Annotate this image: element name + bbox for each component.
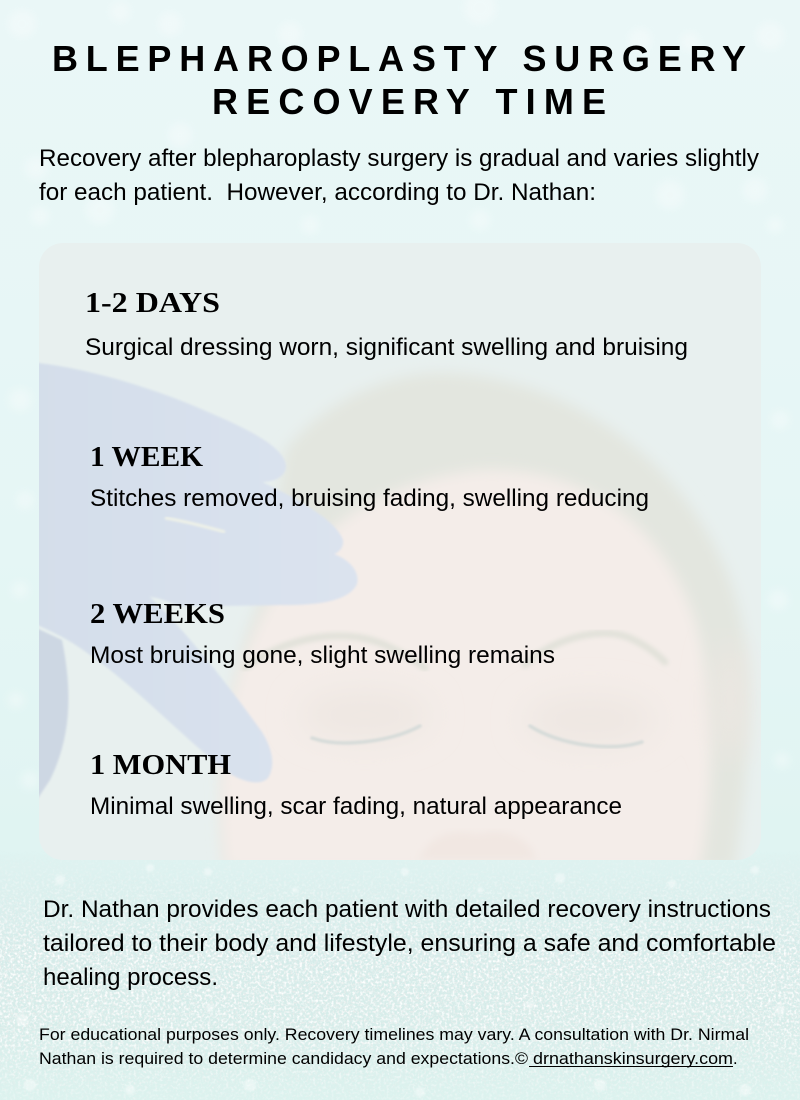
stage: 1-2 days: Surgical dressing worn, significant swelling and bruising — [85, 334, 688, 361]
title: RECOVERY TIME — [212, 81, 606, 122]
stage: 1 month — [90, 749, 622, 820]
photo: thumb in glove — [39, 629, 69, 797]
stage: 1-2 days — [85, 287, 688, 361]
stage: 1-2 days: 1-2 DAYS — [85, 287, 220, 319]
photo: glove hand — [30, 362, 358, 782]
stage: 1 week — [90, 441, 649, 512]
disclaimer: Nathan is required to determine candidacy and expectations.© — [39, 1050, 528, 1068]
closing paragraph: tailored to their body and lifestyle, ensuring a safe and comfortable — [43, 930, 776, 957]
panel: recovery timeline — [39, 293, 759, 860]
stage: 2 weeks — [90, 598, 555, 669]
intro text: Recovery after blepharoplasty surgery is gradual and varies slightly — [39, 145, 759, 172]
title: BLEPHAROPLASTY SURGERY — [52, 38, 746, 79]
disclaimer — [39, 1026, 749, 1068]
stage: 1 week: 1 WEEK — [90, 441, 203, 473]
panel backdrop — [39, 243, 761, 860]
title — [52, 38, 746, 122]
stage: 2 weeks: Most bruising gone, slight swelling remains — [90, 642, 555, 669]
disclaimer: . — [733, 1050, 738, 1068]
photo: eyelashes — [312, 726, 642, 747]
photo: glove finger crease — [165, 518, 225, 532]
disclaimer: drnathanskinsurgery.com — [533, 1050, 733, 1068]
stage: 1 week: Stitches removed, bruising fading, swelling reducing — [90, 485, 649, 512]
photo: woman's face with gloved hand — [30, 362, 749, 870]
photo: hair — [221, 373, 749, 870]
photo: nose — [418, 832, 537, 860]
intro text: for each patient. However, according to Dr. Nathan: — [39, 179, 596, 206]
closing paragraph: Dr. Nathan provides each patient with detailed recovery instructions — [43, 896, 771, 923]
closing paragraph: healing process. — [43, 964, 218, 991]
stage: 1 month: Minimal swelling, scar fading, natural appearance — [90, 793, 622, 820]
photo: eyebrows — [245, 633, 665, 668]
stage: 2 weeks: 2 WEEKS — [90, 598, 225, 630]
closing paragraph — [43, 896, 776, 991]
disclaimer: For educational purposes only. Recovery timelines may vary. A consultation with Dr. Nirmal — [39, 1026, 749, 1044]
photo: skin — [220, 470, 711, 870]
intro text — [39, 145, 759, 206]
stage: 1 month: 1 MONTH — [90, 749, 231, 781]
photo: brow and eye shadows — [300, 640, 744, 760]
